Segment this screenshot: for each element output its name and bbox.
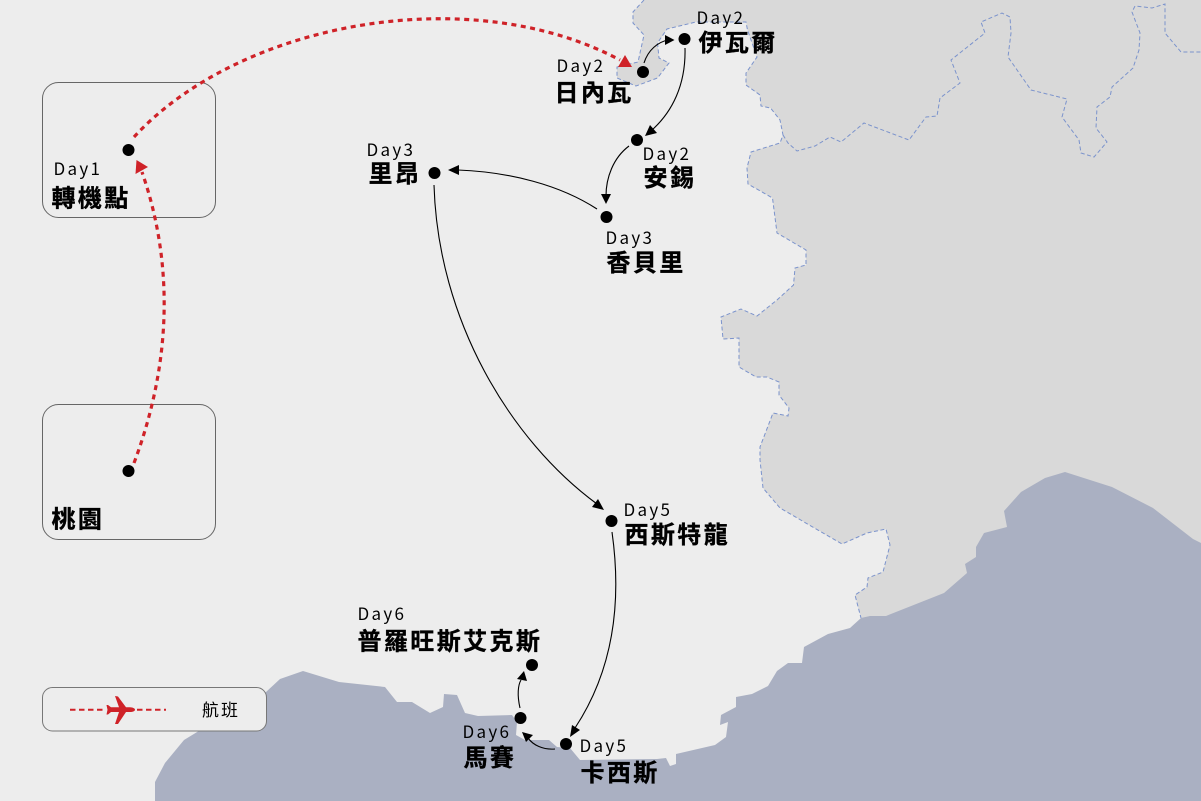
map: neighbouring land <box>617 0 1201 640</box>
panel: transfer point box <box>42 82 216 218</box>
stop: Sisteron <box>606 496 730 550</box>
flight route: transfer point to Geneva <box>134 19 632 137</box>
stop: Chambery: 香貝里 <box>606 243 686 278</box>
stop: Sisteron: Day5 <box>624 496 672 521</box>
stop: Chambery: Day3 <box>606 224 654 249</box>
panel: Taoyuan box <box>42 404 216 540</box>
stop: Cassis: 卡西斯 <box>580 753 660 788</box>
stop: transfer point: 轉機點 <box>52 178 131 214</box>
stop: Taoyuan <box>52 465 134 534</box>
stop: transfer point: Day1 <box>54 155 102 180</box>
stop: Aix-en-Provence: Day6 <box>358 600 406 625</box>
stop: Aix-en-Provence <box>358 600 542 671</box>
stop: transfer point <box>52 144 134 214</box>
stop: Yvoire: 伊瓦爾 <box>698 23 778 58</box>
stop: Annecy: Day2 <box>642 140 691 165</box>
route: Annecy to Chambery <box>601 146 629 204</box>
stop: Lyon: Day3 <box>366 136 415 161</box>
legend: flight <box>42 688 266 731</box>
stop: Taoyuan: 桃園 <box>52 500 104 534</box>
stop: Lyon <box>366 136 440 189</box>
stop: Sisteron: 西斯特龍 <box>624 515 730 550</box>
route: Lyon to Sisteron <box>434 185 604 510</box>
route: Geneva to Yvoire <box>644 35 674 63</box>
stop: Yvoire <box>678 4 778 58</box>
route: Sisteron to Cassis <box>570 532 616 737</box>
stop: Cassis <box>560 732 660 788</box>
stop: Yvoire: Day2 <box>696 4 745 29</box>
route: Marseille to Aix-en-Provence <box>517 671 527 708</box>
stop: Marseille: Day6 <box>462 718 511 743</box>
stop: Geneva <box>554 52 649 108</box>
stop: Geneva: 日內瓦 <box>554 73 634 108</box>
stop: Aix-en-Provence: 普羅旺斯艾克斯 <box>358 622 542 656</box>
icon: airplane <box>106 696 135 724</box>
map: western border line <box>617 0 890 618</box>
map: inner border line <box>783 4 1201 157</box>
route: Chambery to Lyon <box>448 165 597 209</box>
route: Cassis to Marseille <box>522 732 555 749</box>
stop: Marseille <box>462 712 526 773</box>
stop: Lyon: 里昂 <box>368 154 421 189</box>
flight route: Taoyuan to transfer point <box>134 160 164 463</box>
stop: Annecy: 安錫 <box>644 158 696 193</box>
map: sea <box>155 472 1201 801</box>
route: Yvoire to Annecy <box>645 48 685 136</box>
stop: Chambery <box>600 211 686 278</box>
legend: flight: 航班 <box>202 696 240 721</box>
stop: Cassis: Day5 <box>580 732 628 757</box>
stop: Marseille: 馬賽 <box>464 738 516 773</box>
stop: Annecy <box>631 134 696 193</box>
stop: Geneva: Day2 <box>556 52 605 77</box>
